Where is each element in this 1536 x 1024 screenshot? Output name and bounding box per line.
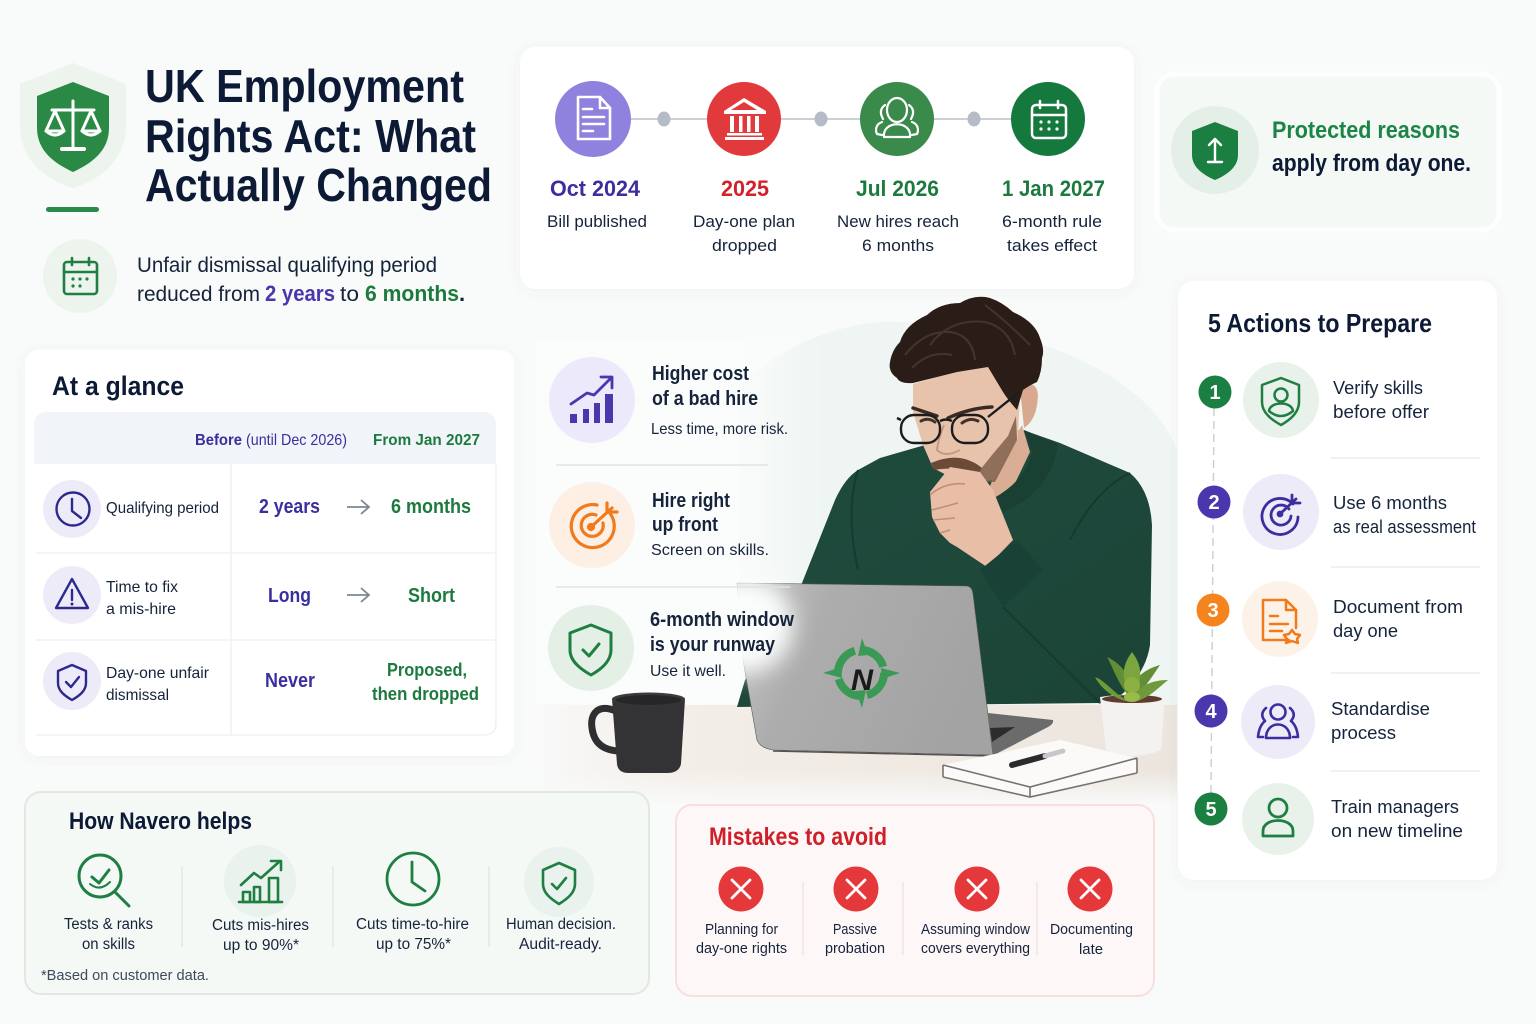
row: hire right (549, 482, 769, 568)
eyes (921, 419, 978, 423)
milestone: 2025 (693, 82, 795, 255)
arm shading (852, 470, 1130, 703)
action 1 (1198, 362, 1429, 438)
item: human decision (506, 847, 616, 953)
action 1: before offer (1333, 402, 1429, 422)
action 4: process (1331, 723, 1396, 743)
milestone: Jul 2026: New hires reach (837, 212, 959, 231)
action 4: 4 (1205, 701, 1217, 723)
summary statement: 2 years (265, 281, 335, 306)
logo: N compass: N (851, 664, 874, 697)
row: time to fix: a mis-hire (106, 601, 176, 618)
item: cuts time-to-hire (356, 853, 469, 953)
row: day-one unfair dismissal: Never (265, 670, 315, 692)
illustration: man at desk (530, 297, 1177, 805)
milestone: Oct 2024: Bill published (547, 212, 647, 231)
notebook (943, 740, 1137, 797)
icon: calendar (43, 239, 117, 313)
action 5: Train managers (1331, 797, 1459, 817)
table header: From Jan 2027 (373, 432, 480, 449)
cuff (980, 540, 1043, 607)
milestone: 1 Jan 2027 (1002, 82, 1105, 255)
mistake 4: Documenting (1050, 922, 1133, 938)
heading: Mistakes to avoid (709, 823, 887, 851)
row: time to fix: Long (268, 585, 311, 607)
row: time to fix: Time to fix (106, 579, 178, 596)
panel: mistakes to avoid (676, 805, 1154, 996)
heading: How Navero helps (69, 808, 252, 835)
action 3: day one (1333, 621, 1398, 641)
mistake 1 (696, 866, 787, 957)
milestone: Oct 2024 (547, 81, 647, 231)
row: qualifying period: Qualifying period (106, 500, 219, 517)
callout text: Protected reasons (1272, 117, 1460, 144)
item: human decision: Human decision. (506, 916, 616, 933)
item: cuts mis-hires: Cuts mis-hires (212, 917, 309, 934)
mistake 4: late (1079, 942, 1103, 958)
action 1: 1 (1209, 382, 1221, 404)
row: day-one unfair dismissal: dismissal (106, 687, 169, 704)
milestone: Oct 2024: Oct 2024 (550, 176, 641, 201)
summary statement: to (340, 283, 359, 306)
laptop base (988, 713, 1053, 755)
callout text: apply from day one. (1272, 150, 1471, 177)
item: tests and ranks (64, 855, 153, 953)
table header (34, 412, 496, 464)
panel: At a glance comparison table (25, 350, 514, 756)
sweater collar (994, 430, 1058, 512)
laptop lid (737, 583, 993, 755)
action 5: 5 (1205, 799, 1217, 821)
row: day-one unfair dismissal: Day-one unfair (106, 665, 210, 682)
logo: N compass (823, 638, 900, 708)
laptop shadow edge (773, 751, 993, 756)
ear (1020, 384, 1038, 428)
timeline connector (630, 112, 1012, 126)
action 2: Use 6 months (1333, 493, 1447, 513)
title (145, 60, 492, 211)
milestone: 1 Jan 2027: takes effect (1007, 236, 1097, 255)
item: cuts time-to-hire: up to 75%* (376, 936, 451, 953)
title: Actually Changed (145, 159, 492, 211)
illustration: green backdrop (740, 322, 1177, 760)
mistake 2: probation (825, 941, 885, 957)
row: hire right: Screen on skills. (651, 542, 769, 559)
desk (530, 705, 1177, 805)
action 5 (1194, 783, 1463, 855)
icon: green shield check (570, 625, 611, 675)
panel: protected reasons callout (1157, 74, 1499, 230)
icon: orange target (571, 503, 617, 548)
action 2 (1198, 474, 1476, 550)
stubble (968, 416, 1017, 482)
milestone: 2025: Day-one plan (693, 212, 795, 231)
summary statement (137, 254, 465, 306)
summary statement: . (459, 281, 465, 306)
mistake 3: Assuming window (921, 922, 1030, 938)
item: cuts mis-hires: up to 90%* (223, 937, 299, 954)
action 2: 2 (1208, 492, 1220, 514)
title: UK Employment (145, 60, 464, 112)
row: day-one unfair dismissal: then dropped (372, 684, 479, 704)
row: hire right: up front (652, 514, 718, 536)
item: tests and ranks: Tests & ranks (64, 916, 153, 933)
heading: At a glance (52, 371, 184, 401)
action 3: 3 (1207, 600, 1219, 622)
milestone: Jul 2026: Jul 2026 (856, 176, 939, 201)
mistake 4 (1050, 866, 1133, 958)
action 3 (1196, 581, 1463, 657)
item: human decision: Audit-ready. (519, 936, 602, 953)
summary statement: Unfair dismissal qualifying period (137, 254, 437, 277)
footnote: *Based on customer data. (41, 967, 209, 984)
panel: soft white backing (536, 342, 826, 704)
table header: Before (195, 432, 242, 449)
heading: 5 Actions to Prepare (1208, 308, 1432, 338)
milestone: 2025: dropped (712, 236, 777, 255)
row: 6-month window: Use it well. (650, 663, 726, 680)
action 5: on new timeline (1331, 821, 1463, 841)
panel: how Navero helps (25, 792, 649, 994)
row: qualifying period (43, 480, 471, 538)
row: qualifying period: 6 months (391, 496, 471, 518)
summary statement: reduced from (137, 283, 260, 306)
action 4 (1194, 685, 1430, 759)
keyboard (990, 727, 1015, 742)
milestone: 2025: 2025 (721, 176, 769, 201)
milestone: Jul 2026: 6 months (862, 236, 934, 255)
milestone: 1 Jan 2027: 6-month rule (1002, 212, 1102, 231)
row: higher cost: Higher cost (652, 363, 749, 385)
milestone: Jul 2026 (837, 82, 959, 255)
row: higher cost: of a bad hire (652, 388, 758, 410)
text glow over laptop (697, 577, 793, 673)
title accent rule (46, 207, 99, 212)
hair (890, 297, 1043, 410)
mistake 2: Passive (833, 922, 877, 938)
row: time to fix (43, 566, 455, 624)
moustache (931, 458, 982, 474)
row: 6-month window (548, 605, 794, 691)
action 2: as real assessment (1333, 517, 1476, 537)
mistake 1: day-one rights (696, 941, 787, 957)
panel: why it matters (548, 357, 794, 691)
item: cuts time-to-hire: Cuts time-to-hire (356, 916, 469, 933)
pen (1012, 756, 1045, 765)
eyebrows (913, 407, 992, 418)
mistake 2 (825, 866, 885, 957)
panel: timeline (520, 47, 1134, 289)
mistake 3 (921, 866, 1030, 957)
action 4: Standardise (1331, 699, 1430, 719)
item: cuts mis-hires (212, 845, 309, 954)
neck (985, 425, 1030, 498)
hair strands (905, 305, 1030, 368)
summary statement: 6 months (365, 281, 459, 306)
hand (930, 467, 1013, 567)
mistake 1: Planning for (705, 922, 778, 938)
row: qualifying period: 2 years (259, 496, 320, 518)
glasses (897, 393, 1018, 443)
row: 6-month window: 6-month window (650, 609, 794, 631)
icon: rising chart (570, 377, 613, 423)
icon: shield with arrow (1192, 122, 1238, 180)
callout text (1272, 117, 1471, 177)
row: higher cost: Less time, more risk. (651, 421, 788, 438)
action 3: Document from (1333, 597, 1463, 617)
sweater (737, 430, 1152, 708)
face (913, 366, 1020, 482)
panel: 5 actions to prepare (1178, 281, 1497, 880)
header: title block (20, 60, 492, 313)
plant (1095, 652, 1168, 756)
milestone: 1 Jan 2027: 1 Jan 2027 (1002, 176, 1105, 201)
row: 6-month window: is your runway (650, 634, 776, 656)
row: time to fix: Short (408, 585, 455, 607)
icon: scales shield (20, 63, 126, 188)
title: Rights Act: What (145, 110, 476, 162)
nose (937, 425, 960, 454)
mistake 3: covers everything (921, 941, 1030, 957)
row: day-one unfair dismissal (43, 652, 479, 710)
row: hire right: Hire right (652, 490, 730, 512)
item: tests and ranks: on skills (82, 936, 135, 953)
row: higher cost (549, 357, 788, 443)
mug (592, 692, 685, 773)
table header: (until Dec 2026) (246, 432, 347, 449)
row: day-one unfair dismissal: Proposed, (387, 660, 467, 680)
action 1: Verify skills (1333, 378, 1423, 398)
